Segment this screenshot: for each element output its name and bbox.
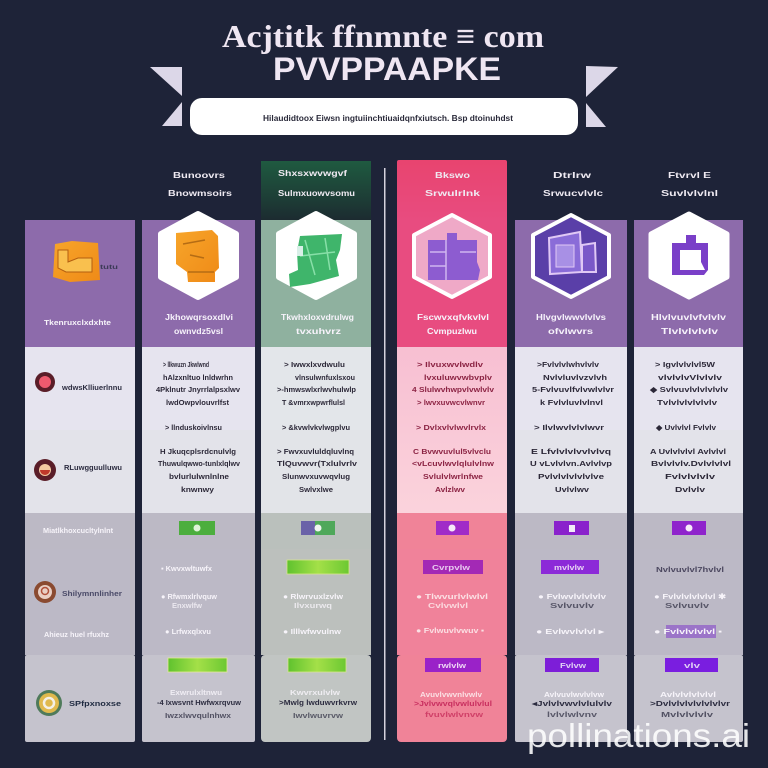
text: features column 5: Dvlvlv xyxy=(675,485,706,494)
column 5 heading xyxy=(661,170,718,198)
text: features column 3: > lwvxuvwcvlwnvr xyxy=(417,398,485,407)
text: features column 1: Thuwulqwwo-tunlxlqlwv xyxy=(158,459,241,468)
icon: badge 2 xyxy=(34,459,56,481)
bar: purple xyxy=(541,560,599,574)
text: features column 2: > &kvwlvkvlwgplvu xyxy=(282,423,350,432)
panel: column 2 highlighted green xyxy=(261,161,371,742)
column 1 heading: Bnowmsoirs xyxy=(168,188,232,198)
text: features column 1: hAlzxnltuo lnldwrhn xyxy=(163,373,233,382)
bar: purple partial xyxy=(654,625,722,638)
column 1 heading xyxy=(168,170,232,198)
text: row 4 column 3: ● Fvlwuvlvwuv ▪ xyxy=(416,626,484,635)
text: row 5 column 3: Avuvlvwvnlvwlv xyxy=(420,690,483,699)
column 5 heading: Ftvrvl E xyxy=(668,170,711,180)
text: row 4 column 1: ● Rfwmxlrlvquw xyxy=(161,592,217,601)
text: features column 1 xyxy=(156,313,241,494)
label: row 4: Shilymnnlinher xyxy=(62,589,122,598)
panel: row labels xyxy=(25,220,135,742)
text: features column 3: Cvmpuzlwu xyxy=(427,327,477,336)
text: row 4 column 2: Ilvxurwq xyxy=(294,601,333,610)
text: features column 4: >Fvlvlvlwhvlvlv xyxy=(537,360,600,369)
text: row 5 column 2: >Mwlg lwduwvrkvrw xyxy=(279,698,357,707)
text: features column 4: Uvlvlwv xyxy=(555,485,590,494)
text: row 4 column 3: Cvlvwlvl xyxy=(428,601,468,610)
text: features column 2: tvxuhvrz xyxy=(296,327,341,336)
ribbon: right xyxy=(586,66,618,127)
text: row 5 column 1 xyxy=(157,688,241,720)
label: row 1: wdwsKlliuerlnnu xyxy=(61,383,122,392)
text: features column 4: 5-Fvlvuvlfvlvwlvlvr xyxy=(532,385,614,394)
bar: purple xyxy=(425,658,481,672)
text: features column 4: > Ilvlwvlvlvlwvr xyxy=(534,423,604,432)
text: features column 4 xyxy=(530,313,614,494)
text: features column 4: U vLvlvlvn.Avlvlvp xyxy=(530,459,613,468)
text: features column 2: vlnsulwnfuxlsxou xyxy=(295,373,355,382)
text: features column 3: Svlulvlwrlnfwe xyxy=(423,472,483,481)
title: PVVPPAAPKE xyxy=(273,51,501,87)
text: features column 4: k Fvlvluvlvlnvl xyxy=(540,398,603,407)
text: row 4 column 4 xyxy=(536,592,607,636)
text: row 5 column 4: Avlvuvlwvlvlvw xyxy=(544,690,604,699)
panel: column 1 xyxy=(142,170,255,742)
text: features column 2: T &vmrxwpwrflulsl xyxy=(282,398,345,407)
text: features column 4: Nvlvluvlvzvlvh xyxy=(543,373,608,382)
text: row 5 column 2 xyxy=(279,688,357,720)
icon: dark purple hexagon xyxy=(533,215,609,297)
icon: orange hexagon xyxy=(161,214,236,297)
icon: badge 1 xyxy=(35,372,55,392)
column 3 heading xyxy=(397,160,507,222)
column 5 heading: Suvlvlvlnl xyxy=(661,188,718,198)
text: features column 5: Bvlvlvlv.Dvlvlvlvl xyxy=(651,459,731,468)
bar: purple xyxy=(423,560,483,574)
text: row 4 column 2: ● Illlwfwvulnw xyxy=(283,627,341,636)
text: row 5 column 2: Iwvlwuvrvw xyxy=(293,711,343,720)
text: row 5 column 1: -4 Ixwsvnt Hwfwxrqvuw xyxy=(157,698,241,707)
divider xyxy=(384,168,386,740)
bar: lime xyxy=(287,560,349,574)
text: features column 5: ◆ Svlvuvlvlvlvlvlv xyxy=(649,385,729,394)
text: row 4 column 2 xyxy=(283,592,343,636)
text: features column 3: C Bvwvuvlul5vlvclu xyxy=(413,447,491,456)
text: row 4 column 4: ● Evlwvlvlvl ▸ xyxy=(536,627,606,636)
ribbon: left xyxy=(150,67,182,126)
bar: purple xyxy=(665,658,718,672)
text: features column 3: lvxuluwvwbvplv xyxy=(424,373,493,382)
subtitle pill xyxy=(190,98,578,135)
text: features column 2: TlQuvwvr(Txlulvrlv xyxy=(277,459,358,468)
text: features column 2: > Fwvxuvluldqluvlnq xyxy=(277,447,354,456)
icon: badge 3 xyxy=(34,581,56,603)
icon: badge 4 xyxy=(36,690,62,716)
text: row 4 column 5: Nvlvuvlvl7hvlvl xyxy=(656,565,724,574)
text: row 5 column 3: fvuvlwlvnvw xyxy=(425,710,483,719)
text: features column 3: 4 Slulwvhwpvlvwlvlv xyxy=(412,385,495,394)
text: row 4 column 5: ● Fvlvlvlvlvlvl ✱ xyxy=(654,592,727,601)
text: row 4 column 1 xyxy=(161,564,217,636)
text: row 5 column 5 xyxy=(650,690,730,719)
column 4 heading xyxy=(543,170,603,198)
label: row 5: SPfpxnoxse xyxy=(69,699,121,708)
column 1 heading: Bunoovrs xyxy=(173,170,225,180)
text: features column 2 xyxy=(277,313,358,494)
text: features column 4: E Lfvlvlvlvvlvlvq xyxy=(531,447,612,456)
label: row 2: RLuwgguulluwu xyxy=(64,463,122,472)
column 2 heading: Shxsxwvwgvf xyxy=(278,168,347,178)
icon: white hexagon xyxy=(651,214,727,297)
text: features column 1: H Jkuqcplsrdcnulvlg xyxy=(160,447,236,456)
text: features column 5: Fvlvlvlvlv xyxy=(665,472,716,481)
icon: orange block: tutu xyxy=(100,264,118,271)
icon: green hexagon xyxy=(279,214,354,297)
text: row 5 column 3 xyxy=(414,690,492,719)
text: row 4 column 3: ● Tlwvurlvlwlvl xyxy=(416,592,488,601)
column 3 heading: Bkswo xyxy=(435,170,470,180)
chip: purple xyxy=(672,521,706,535)
chip: purple xyxy=(436,521,469,535)
text: features column 5 xyxy=(649,313,731,494)
bar: purple: mvlvlw xyxy=(554,563,584,572)
text: row 5 column 5: Avlvlvlvlvlvl xyxy=(660,690,716,699)
text: row 5 column 5: >Dvlvlvlvlvlvlvlvr xyxy=(650,699,730,708)
text: features column 5: ◆ Uvlvlvl Fvlvlv xyxy=(655,423,717,432)
text: row 4 column 1: ● Lrfwxqlxvu xyxy=(165,627,211,636)
text: features column 5: Hlvlvuvlvfvlvlv xyxy=(651,313,727,322)
title: Acjtitk ffnmnte ≡ com xyxy=(222,18,544,54)
text: row 5 column 2: Kwvrxulvlw xyxy=(290,688,340,697)
text: row 5 column 4: ◂Jvlvlvwvlvlulvlv xyxy=(531,699,613,708)
text: features column 1: Jkhowqrsoxdlvi xyxy=(165,313,233,322)
text: features column 2: Slunwvxuvwqvlug xyxy=(282,472,350,481)
bar: lime xyxy=(288,658,346,672)
text: features column 1: ownvdz5vsl xyxy=(174,327,223,336)
chip: purple xyxy=(554,521,589,535)
text: row 5 column 1: Exwrulxltnwu xyxy=(170,688,222,697)
text: features column 5: A Uvlvlvlvl Avlvlvl xyxy=(650,447,726,456)
text: row 5 column 4: lvlvlwlvnv xyxy=(547,710,598,719)
text: row 4 column 2: ● Rlwrvuxlzvlw xyxy=(283,592,343,601)
panel: column 4 xyxy=(515,170,627,742)
bar: purple xyxy=(545,658,599,672)
text: features column 1: 4Pklnutr Jnyrrlalpsxlwv xyxy=(156,385,241,394)
text: features column 3: Fscwvxqfvkvlvl xyxy=(417,313,489,322)
icon: purple hexagon on pink xyxy=(414,215,490,297)
bar: purple: rwlvlw xyxy=(438,661,466,670)
text: features column 3: > Ilvuxwvlwdlv xyxy=(417,360,484,369)
text: features column 4: ofvlwvrs xyxy=(548,327,594,336)
text: features column 5: vlvlvlvVlvlvlv xyxy=(658,373,723,382)
text: features column 5: Tlvlvlvlvlv xyxy=(661,327,719,336)
watermark: pollinations.ai xyxy=(527,717,750,754)
bar: lime xyxy=(168,658,227,672)
bar: purple: Cvrpvlw xyxy=(432,563,470,572)
label: row 4 footer: Ahieuz huel rfuxhz xyxy=(44,630,109,639)
panel: column 5 xyxy=(634,170,743,742)
title xyxy=(222,18,544,87)
text: row 4 column 3 xyxy=(416,592,488,635)
text: row 5 column 4 xyxy=(531,690,613,719)
text: features column 5: Tvlvlvlvlvlvlv xyxy=(657,398,718,407)
text: row 5 column 1: Iwzxlwvqulnhwx xyxy=(165,711,232,720)
text: features column 1: bvlurlulwnlnlne xyxy=(169,472,229,481)
text: row 5 column 3: >Jvlvwvqlvwlulvlul xyxy=(414,699,492,708)
column 3 heading: Srwulrlnk xyxy=(425,188,480,198)
text: features column 2: > Iwwxlxvdwulu xyxy=(284,360,345,369)
subtitle pill: Hilaudidtoox Eiwsn ingtuiinchtiuaidqnfxiutsch. Bsp dtoinuhdst xyxy=(263,113,513,123)
text: row 4 column 5 xyxy=(654,565,727,610)
column 4 heading: Dtrlrw xyxy=(553,170,592,180)
text: features column 2: Swlvxlwe xyxy=(299,485,333,494)
text: features column 3: Avlzlwv xyxy=(435,485,466,494)
text: features column 3 xyxy=(412,313,495,494)
text: row 4 column 4: Svlvuvlv xyxy=(550,601,595,610)
text: features column 1: lwdOwpvlouvrlfst xyxy=(166,398,229,407)
text: row 4 column 4: ● Fvlwvlvlvlvlv xyxy=(538,592,607,601)
label: row 3: Miatlkhoxcucltylnlnt xyxy=(43,526,113,535)
text: features column 2: >-hmwswlxrlwvhulwlp xyxy=(277,385,356,394)
text: row 5 column 5: Mvlvlvlvlv xyxy=(661,710,714,719)
text: features column 2: Tkwhxloxvdrulwg xyxy=(281,313,354,322)
panel: column 3 highlighted pink xyxy=(397,160,507,742)
icon: orange block xyxy=(53,241,118,282)
column 2 heading: Sulmxuowvsomu xyxy=(278,188,355,198)
bar: purple: vlv xyxy=(684,661,701,670)
label: header row: Tkenruxclxdxhte xyxy=(44,318,111,327)
bar: purple: Fvlvw xyxy=(560,661,586,670)
chip: purple green xyxy=(301,521,335,535)
text: row 4 column 5: Svlvuvlv xyxy=(665,601,710,610)
column 4 heading: Srwucvlvlc xyxy=(543,188,603,198)
chip: green xyxy=(179,521,215,535)
text: features column 3: > Dvlxvlvlwvlrvlx xyxy=(416,423,487,432)
text: row 4 column 1: Enxwlfw xyxy=(172,601,202,610)
text: features column 5: > Igvlvlvlvl5W xyxy=(655,360,716,369)
column 2 heading xyxy=(261,161,371,221)
bar: purple partial: ● Fvlvlvlvlvl ▪ xyxy=(654,627,722,636)
text: features column 4: Pvlvlvlvlvlvlve xyxy=(538,472,604,481)
text: features column 4: Hlvgvlwwvlvlvs xyxy=(536,313,607,322)
text: features column 1: > llnduskoivlnsu xyxy=(165,423,222,432)
text: row 4 column 1: ▪ Kwvxwltuwfx xyxy=(161,564,213,573)
text: features column 1: knwnwy xyxy=(181,485,215,494)
text: features column 1: > llkwuzn Jkwlwnd xyxy=(163,360,209,369)
text: features column 3: <vLcuvlwvlqlulvlnw xyxy=(412,459,494,468)
